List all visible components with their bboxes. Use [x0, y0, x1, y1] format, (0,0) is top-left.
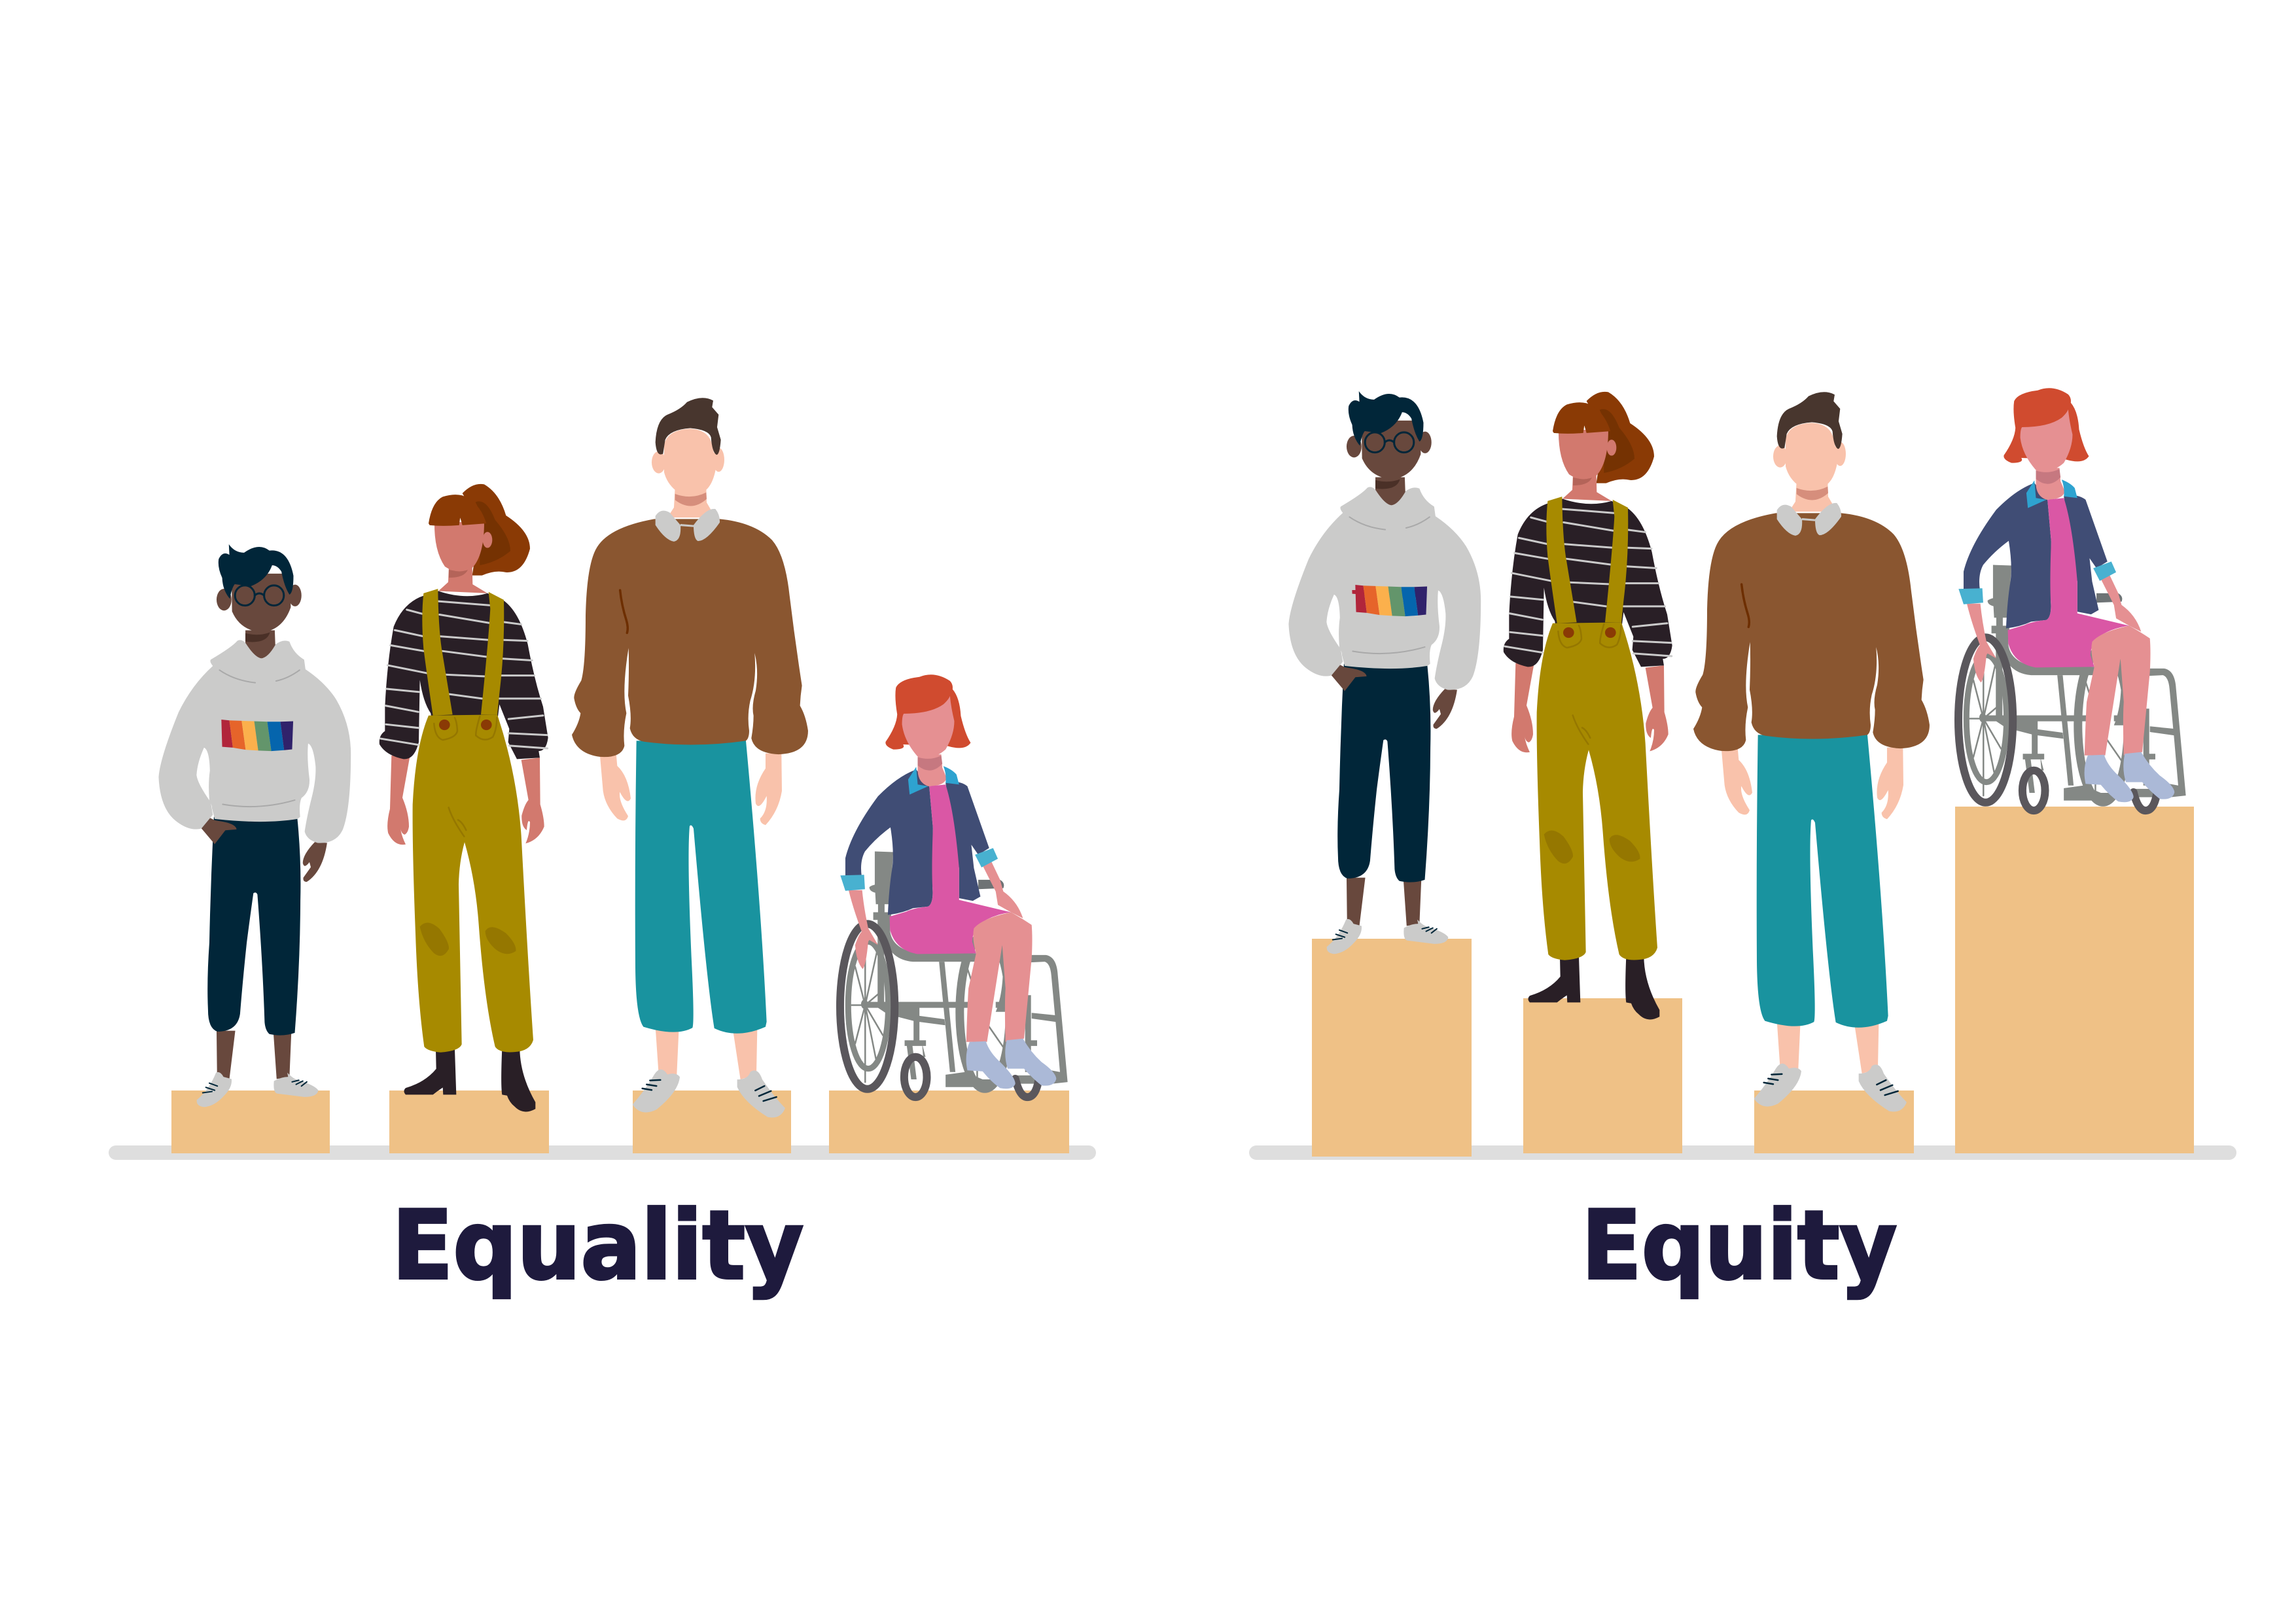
person: hoodie and glasses: [158, 544, 351, 1107]
person raised: hoodie and glasses: [1288, 391, 1481, 954]
platforms: equity: [1312, 807, 2194, 1157]
rainbow band: [221, 720, 293, 751]
wheelchair: [840, 851, 1068, 1097]
ground line: equity: [1249, 1145, 2236, 1160]
person: striped top and overalls: [380, 484, 548, 1111]
panel: equity: [1249, 388, 2236, 1301]
person raised: striped top and overalls: [1504, 392, 1672, 1019]
ground line: equality: [109, 1145, 1096, 1160]
sweater stripes: [381, 601, 548, 748]
glasses: [235, 585, 284, 606]
heading: Equality: Equality: [392, 1191, 804, 1301]
person: brown sweater and teal trousers, unchanged: [1693, 392, 1930, 1111]
hoodie patch under moved rainbow: [1348, 564, 1428, 590]
person: brown sweater and teal trousers: [572, 398, 808, 1117]
person: wheelchair user: [840, 674, 1068, 1097]
panel: equality: [109, 398, 1096, 1301]
rainbow band: equity hoodie: [1355, 585, 1427, 616]
heading: Equity: Equity: [1581, 1191, 1897, 1301]
person raised: wheelchair user: [1958, 388, 2186, 811]
platforms: equality: [171, 1091, 1069, 1153]
